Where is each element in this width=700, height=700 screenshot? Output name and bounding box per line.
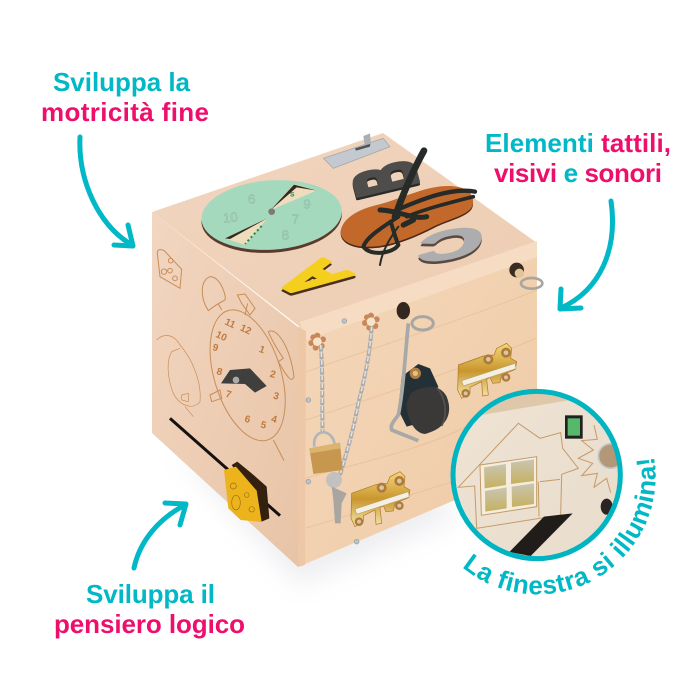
heading: fine motor skills	[41, 67, 209, 127]
left chain	[321, 345, 323, 433]
cube right face	[298, 243, 537, 567]
engraved cheese	[157, 250, 182, 288]
corner edge	[298, 327, 306, 567]
clock numerals: 7	[224, 389, 233, 401]
black ribbon	[509, 513, 573, 556]
mint number wheel: 10	[222, 209, 238, 226]
clock numerals: 12	[238, 323, 253, 338]
left face engravings and toys	[157, 250, 299, 522]
inset: window detail	[450, 390, 627, 563]
wooden band	[482, 394, 568, 415]
heading: tactile elements	[485, 128, 671, 188]
heading: logical thinking	[54, 579, 245, 639]
yellow letter A: A	[258, 251, 370, 305]
key	[326, 472, 347, 523]
clock numerals	[211, 317, 281, 432]
curved caption: La finestra si illumina!	[463, 459, 656, 595]
heading: logical thinking: Sviluppa il	[86, 579, 215, 609]
house outline	[458, 423, 578, 528]
wooden activity cube	[152, 133, 542, 567]
heading: fine motor skills: motricità fine	[41, 97, 209, 127]
clock numerals: 4	[270, 414, 279, 426]
silver slide bolt	[323, 133, 390, 168]
dark letter B: B	[334, 155, 437, 206]
cube top face	[152, 133, 537, 327]
clock numerals: 8	[215, 366, 224, 378]
clock numerals: 11	[223, 317, 237, 331]
clock numerals: 2	[269, 369, 277, 381]
padlock	[309, 432, 343, 474]
grey letter C: C	[414, 219, 488, 275]
clock hand	[221, 368, 267, 393]
clock numerals: 3	[272, 391, 281, 403]
inset photo	[456, 394, 618, 556]
engraved alarm clock	[196, 277, 299, 461]
mint number wheel: S	[290, 192, 295, 199]
eye bolt top right	[509, 263, 542, 289]
flower knob right	[362, 313, 380, 331]
heading: tactile elements: visivi e sonori	[494, 158, 662, 188]
top board front edge	[300, 241, 537, 340]
clock numerals: 5	[259, 420, 268, 432]
yellow letter A: A	[258, 254, 370, 307]
flower knob left	[308, 333, 326, 351]
grey letter C: C	[414, 216, 488, 272]
clock numerals: 1	[257, 344, 267, 357]
mint number wheel	[199, 176, 344, 257]
heading: logical thinking: pensiero logico	[54, 609, 245, 639]
clock numerals: 6	[243, 414, 252, 426]
cube shadow	[175, 450, 460, 585]
mint number wheel: 9	[303, 196, 311, 211]
green switch	[565, 415, 583, 439]
window	[480, 457, 537, 515]
dark letter B: B	[334, 153, 437, 203]
right face hardware	[306, 302, 517, 544]
arrow: to cheese slider	[134, 503, 186, 568]
brass latch bottom	[351, 472, 410, 527]
sun zigzag	[578, 425, 611, 493]
brass latch right	[458, 343, 517, 398]
caster wheel	[398, 364, 449, 434]
teal ring	[453, 391, 620, 559]
arrow: to left face	[80, 137, 133, 246]
right chain	[340, 327, 372, 475]
hook and eye	[391, 302, 433, 441]
top face toys	[199, 133, 542, 307]
screws	[306, 319, 359, 544]
heading: tactile elements: Elementi tattili,	[485, 128, 671, 158]
mint number wheel: 8	[282, 227, 289, 242]
clock numerals: 10	[214, 329, 229, 344]
cheese slider slot	[170, 418, 280, 522]
leather shoe with laces	[341, 151, 475, 265]
clock numerals: 9	[211, 342, 220, 354]
mint number wheel: 7	[292, 211, 299, 226]
heading: fine motor skills: Sviluppa la	[53, 67, 191, 97]
engraved mouse	[157, 335, 200, 417]
mirror	[598, 442, 618, 470]
wood grain	[306, 290, 537, 528]
cube left face	[152, 212, 298, 567]
mint number wheel: 6	[247, 191, 256, 207]
dark knob	[601, 499, 613, 515]
arrow: to right face	[560, 201, 612, 309]
